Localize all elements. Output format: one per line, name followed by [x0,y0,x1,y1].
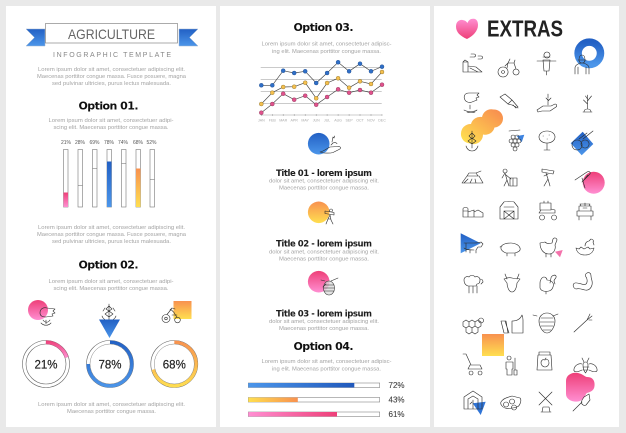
line chart: APR [291,118,298,122]
item: title 03: dolor sit amet, consectetuer adipiscing elit. [269,319,379,325]
panel: middle column [220,6,430,427]
progress bar: 61% [248,410,405,419]
heading: option 01: Option 01. [78,100,138,112]
intro text: Maecenas porttitor congue massa. Fusce posuere, magna [37,74,187,80]
donut: 68% [151,340,198,388]
line chart: SEP [345,118,353,122]
panel: left column [6,6,216,427]
title banner: AGRICULTURE [68,26,155,42]
icon: greenhouse [464,391,482,409]
icon: lawn mower [463,354,482,375]
icon: tractor [498,59,519,77]
title banner [26,24,198,46]
icon: telescope man [542,169,554,186]
line chart: DEC [378,118,386,122]
line chart: MAR [279,118,288,122]
icon: small blue triangle [517,135,524,142]
option 01 text: scing elit. Maecenas porttitor congue massa. [54,125,169,131]
icon: barn [500,201,518,219]
icon: harvester [462,171,483,183]
intro text: sed pulvinar ultricies, purus lectus malesuada. [52,81,171,87]
donut: 21% [22,340,70,388]
text block: Lorem ipsum dolor sit amet, consectetuer adipiscing elit. [38,225,186,231]
icon: pink circle [583,172,605,194]
icon: farmer with shovel [506,356,517,375]
icon: seedling in hand [537,94,557,112]
series: pink [259,83,384,115]
option 03 text [262,42,392,55]
item: title 02: Title 02 - lorem ipsum [276,239,372,249]
icon: bee [574,358,597,373]
icon: beehive [533,313,558,333]
item: title 01 [269,169,379,192]
item: title 01: dolor sit amet, consectetuer adipiscing elit. [269,178,379,184]
item: title 03 [269,309,379,332]
icon: sheep [464,276,483,293]
line chart: NOV [367,118,375,122]
text block: sed pulvinar ultricies, purus lectus malesuada. [52,239,171,245]
option 02 text: Lorem ipsum dolor sit amet, consectetuer adipi- [48,279,174,285]
icon: tractor front [577,203,593,220]
icon: farmer [575,55,589,74]
option 01 text: Lorem ipsum dolor sit amet, consectetuer adipi- [48,118,174,124]
icon: large tractor [539,201,557,220]
icon: wheat with blue triangle [99,304,120,338]
icon: pink blob [566,373,595,402]
item: title 01: Title 01 - lorem ipsum [276,169,372,179]
icon: turkey [540,275,556,294]
icon: watering hand [464,93,479,113]
item: title 03: Title 03 - lorem ipsum [276,309,372,319]
line chart: JUL [324,118,330,122]
icon: apple jar [537,352,552,370]
vertical bar chart: 74% [118,140,129,146]
intro text: Lorem ipsum dolor sit amet, consectetuer adipiscing elit. [38,67,186,73]
vertical bar chart: 28% [75,140,86,146]
icon: small blue triangle bottom [473,402,486,415]
footer text: Lorem ipsum dolor sit amet, consectetuer adipiscing elit. [38,402,186,408]
heading: option 02: Option 02. [78,258,138,272]
heading: option 04: Option 04. [294,340,354,353]
item: title 02: Maecenas porttitor congue massa. [279,256,369,262]
icon: tree [539,131,555,150]
line chart: MAY [301,118,310,122]
progress bar: 72%: 72% [388,381,405,390]
icon: pruner [575,172,590,188]
vertical bar chart: 68% [133,140,144,146]
icon: chick in egg [576,239,594,255]
line chart: AUG [334,118,342,122]
intro text [37,67,187,87]
vertical bar chart: 69% [89,140,100,146]
series: blue [259,60,384,87]
donut: 78%: 78% [98,360,122,372]
icon: shovel [573,394,590,411]
progress bar: 43% [248,395,405,404]
icon: scarecrow [537,52,556,75]
icon: tractor with orange square [162,301,192,323]
icon: blue triangle [461,233,481,253]
option 01 text [48,118,174,131]
icon set [462,52,597,412]
option 02 text [48,279,174,292]
icon: pink circle with watering hand [28,300,55,325]
footer text [38,402,186,415]
icon: honeycomb [463,318,484,334]
donut: 21%: 21% [34,360,58,372]
footer text: Maecenas porttitor congue massa. [67,409,156,415]
icon: blue diamond [571,132,593,155]
icon: orange square [482,334,504,356]
icon: blue circle with seedling hand [308,133,340,154]
line chart: OCT [356,118,365,122]
icon: watering can [500,94,518,108]
vertical bar chart [61,140,157,207]
icon: small pink triangle [555,250,563,257]
icon: cow [464,242,483,253]
line chart: JUN [313,118,320,122]
panel: extras [434,6,619,427]
icon: gardener [502,169,517,186]
item: title 02 [269,239,379,262]
progress bar: 72% [248,381,405,390]
option 04 text: Lorem ipsum dolor sit amet, consectetuer adipisc- [262,359,392,365]
icon: rooster [540,238,557,257]
line chart [258,60,386,122]
icon: orange blob [461,109,503,144]
subtitle: INFOGRAPHIC TEMPLATE [53,52,171,59]
series: yellow [259,70,384,106]
option 03 text: ing elit. Maecenas porttitor congue massa. [272,49,381,55]
icon: swan [573,273,592,290]
icon: grapes [509,130,521,151]
vertical bar chart: 78% [104,140,115,146]
icon: heart [456,19,478,39]
item: title 03: Maecenas porttitor congue massa. [279,326,369,332]
icon: shears [572,131,593,150]
icon: smoker [501,315,523,333]
vertical bar chart: 52% [146,140,157,146]
icon: orange circle with telescope man [308,202,334,224]
icon: wheat [466,131,478,151]
option 02 text: scing elit. Maecenas porttitor congue massa. [54,286,169,292]
vertical bar chart: 21% [61,140,72,146]
progress bar: 43%: 43% [388,395,405,404]
icon: farm [463,54,483,72]
icon: pink circle with beehive [308,271,338,295]
line chart: FEB [269,118,276,122]
icon: plant [583,95,592,112]
progress bar: 61%: 61% [388,410,405,419]
icon: pig [500,243,520,256]
option 04 text [262,359,392,372]
icon: farm buildings [463,208,483,217]
line chart: JAN [258,118,265,122]
icon: blue ring [578,42,600,64]
donut: 68%: 68% [163,360,186,372]
item: title 02: dolor sit amet, consectetuer adipiscing elit. [269,250,379,256]
item: title 01: Maecenas porttitor congue massa. [279,186,369,192]
option 03 text: Lorem ipsum dolor sit amet, consectetuer adipisc- [262,42,392,48]
heading: option 03: Option 03. [294,21,354,34]
text block: Maecenas porttitor congue massa. Fusce posuere, magna [37,232,187,238]
text block [37,225,187,245]
option 04 text: ing elit. Maecenas porttitor congue massa. [272,366,381,372]
icon: eggs [501,396,521,410]
icon: windmill [539,392,552,412]
heading: extras: EXTRAS [487,16,563,42]
icon: goat [504,274,520,292]
donut: 78% [86,340,134,388]
icon: pitchfork [574,314,592,332]
